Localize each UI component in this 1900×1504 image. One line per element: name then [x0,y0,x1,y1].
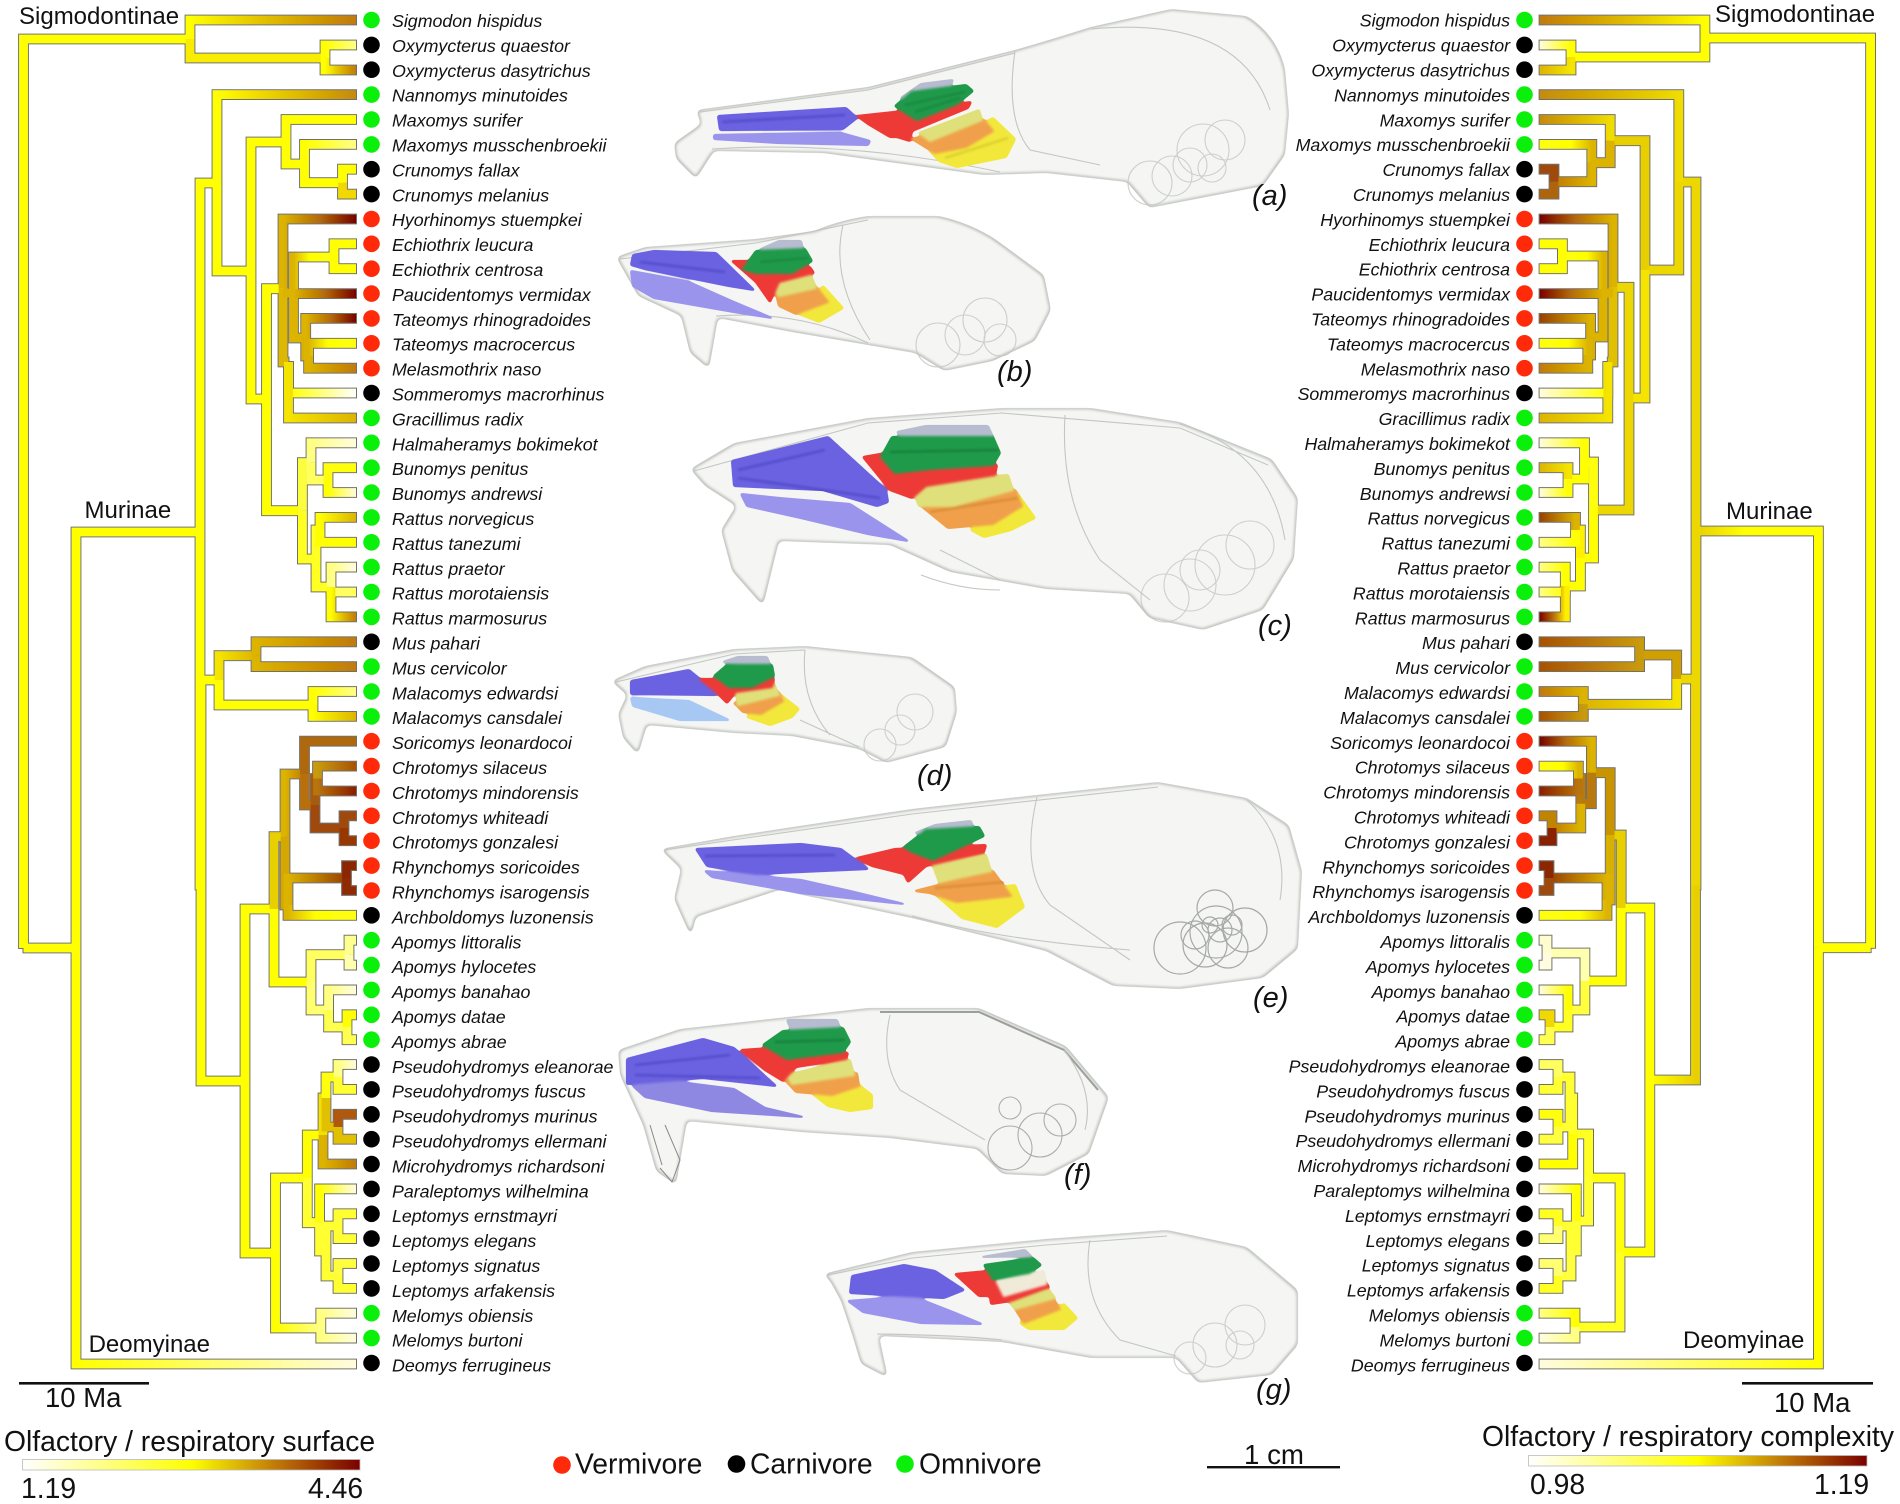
species names, left column: Soricomys leonardocoi [392,733,573,753]
species names, left column: Rattus praetor [392,559,506,579]
species names, left column: Mus cervicolor [392,658,508,678]
species names, right column: Bunomys penitus [1374,459,1510,479]
scale bar left: 10 Ma [19,1382,149,1413]
species names, left column: Paraleptomys wilhelmina [392,1181,589,1201]
species names, right column: Melomys obiensis [1369,1306,1510,1326]
species names, left column: Leptomys arfakensis [392,1281,555,1301]
species names, left column: Chrotomys mindorensis [392,783,579,803]
species names, left column: Microhydromys richardsoni [392,1156,605,1176]
species names, right column: Tateomys macrocercus [1327,334,1510,354]
species names, left column: Rattus marmosurus [392,609,547,629]
species names, right column: Bunomys andrewsi [1360,484,1511,504]
label: Sigmodontinae: Sigmodontinae [19,3,179,30]
species names, right column [1289,11,1511,1375]
species names, left column: Melomys obiensis [392,1306,533,1326]
species names, right column: Mus pahari [1422,633,1511,653]
panel letter (b): (b) [997,356,1032,388]
species names, left column: Tateomys macrocercus [392,335,575,355]
clade: Hyorhinomys to Gracillimus [266,219,356,418]
species names, right column: Malacomys edwardsi [1344,683,1511,703]
species names, left column: Crunomys fallax [392,160,521,180]
panel letter (f): (f) [1064,1159,1091,1191]
species names, left column: Oxymycterus quaestor [392,36,571,56]
colour legend: olfactory / respiratory surface: 4.46 [308,1472,363,1504]
species names, right column: Apomys datae [1395,1007,1510,1027]
clade: Pseudohydromys, Leptomys, Melomys [1540,1064,1650,1338]
skull (e) [660,782,1302,989]
species names, left column: Rattus morotaiensis [392,584,549,604]
colour legend: olfactory / respiratory complexity: 1.19 [1814,1468,1869,1500]
label: Murinae: Murinae [1726,498,1813,525]
species names, left column: Chrotomys whiteadi [392,808,549,828]
species names, right column: Oxymycterus dasytrichus [1311,60,1510,80]
species names, left column: Sigmodon hispidus [392,11,542,31]
species names, right column: Pseudohydromys fuscus [1316,1081,1510,1101]
skull (f) [618,1008,1109,1185]
scale bar right: 10 Ma [1742,1382,1873,1418]
species names, right column: Pseudohydromys murinus [1304,1106,1510,1126]
species names, right column: Gracillimus radix [1379,409,1511,429]
clade labels, right tree [1683,1,1875,1354]
species names, left column: Mus pahari [392,634,481,654]
species names, right column: Leptomys arfakensis [1347,1281,1510,1301]
species names, right column: Tateomys rhinogradoides [1311,310,1510,330]
species names, right column: Halmaheramys bokimekot [1304,434,1511,454]
species names, right column: Paraleptomys wilhelmina [1313,1181,1510,1201]
species names, right column: Echiothrix leucura [1369,235,1510,255]
species names, right column: Oxymycterus quaestor [1332,36,1511,56]
colour legend: olfactory / respiratory surface: 1.19 [21,1472,76,1504]
species names, left column: Leptomys elegans [392,1231,536,1251]
species names, right column: Rhynchomys soricoides [1322,857,1510,877]
species names, left column: Rhynchomys soricoides [392,858,580,878]
species names, left column: Oxymycterus dasytrichus [392,61,591,81]
species names, left column: Echiothrix leucura [392,235,533,255]
colour legend: olfactory / respiratory complexity [1482,1420,1895,1500]
phylogeny: olfactory / respiratory surface (left tree) [24,20,356,1364]
species names, right column: Melasmothrix naso [1361,359,1510,379]
skull (a) [674,9,1289,208]
species names, right column: Pseudohydromys eleanorae [1289,1056,1510,1076]
species names, right column: Nannomys minutoides [1334,85,1510,105]
skull (g) [823,1230,1298,1383]
species names, right column: Melomys burtoni [1380,1330,1511,1350]
clade: Pseudohydromys, Leptomys, Melomys [245,1064,356,1338]
skull (d) [611,646,957,763]
species names, left column: Leptomys ernstmayri [392,1206,558,1226]
diet legend [553,1448,1042,1480]
clade: Mus, Malacomys [201,642,356,885]
clade: Hyorhinomys to Gracillimus [1540,219,1645,418]
species names, left column: Archboldomys luzonensis [391,907,594,927]
legend: vermivore: Vermivore [575,1448,702,1480]
species names, left column: Sommeromys macrorhinus [392,384,605,404]
species names, right column: Apomys littoralis [1380,932,1510,952]
species names, right column: Chrotomys silaceus [1355,758,1510,778]
clade: Nannomys, Maxomys, Crunomys [1540,95,1696,885]
root branches [24,39,286,948]
clade: Halmaheramys, Bunomys, Rattus [1540,398,1629,617]
species names, left column [391,11,614,1376]
species names, left column: Rhynchomys isarogensis [392,882,590,902]
species names, left column: Apomys banahao [391,982,531,1002]
species names, right column: Chrotomys mindorensis [1323,783,1510,803]
species names, left column: Pseudohydromys murinus [392,1107,598,1127]
clade: Halmaheramys, Bunomys, Rattus [266,399,356,617]
species names, right column: Apomys hylocetes [1365,957,1510,977]
colour legend: olfactory / respiratory surface: Olfactory / respiratory surface [4,1425,375,1457]
scale bar right: 10 Ma: 10 Ma [1774,1387,1851,1418]
species names, right column: Mus cervicolor [1395,658,1511,678]
phylogeny: olfactory / respiratory complexity (right tree) [1540,20,1871,1364]
species names, left column: Hyorhinomys stuempkei [392,210,583,230]
species names, left column: Paucidentomys vermidax [392,285,592,305]
species names, left column: Rattus norvegicus [392,509,534,529]
species names, left column: Bunomys andrewsi [392,484,543,504]
species names, right column: Rattus tanezumi [1382,534,1511,554]
label: Deomyinae: Deomyinae [89,1331,210,1358]
species names, right column: Apomys banahao [1371,982,1510,1002]
scale bar left: 10 Ma: 10 Ma [45,1382,122,1413]
species names, right column: Microhydromys richardsoni [1298,1156,1511,1176]
species names, right column: Archboldomys luzonensis [1307,907,1510,927]
clade labels, left tree [19,3,210,1358]
species names, left column: Crunomys melanius [392,185,549,205]
species names, left column: Tateomys rhinogradoides [392,310,591,330]
species names, left column: Maxomys musschenbroekii [392,136,607,156]
species names, right column: Rattus norvegicus [1368,509,1510,529]
species names, right column: Chrotomys gonzalesi [1344,832,1511,852]
species names, right column: Rhynchomys isarogensis [1312,882,1510,902]
species names, left column: Melasmothrix naso [392,360,541,380]
skull (c) [690,408,1298,630]
clade: Sigmodontinae [190,20,356,70]
species names, right column: Sigmodon hispidus [1360,11,1510,31]
species names, right column: Hyorhinomys stuempkei [1320,210,1511,230]
species names, left column: Malacomys cansdalei [392,708,563,728]
clade: Soricomys, Chrotomys, Rhynchomys, Archboldomys, Apomys [201,741,356,1081]
species names, right column: Crunomys fallax [1383,160,1511,180]
species names, right column: Leptomys signatus [1362,1256,1510,1276]
species names, left column: Echiothrix centrosa [392,260,543,280]
species names, right column: Soricomys leonardocoi [1330,733,1511,753]
species names, right column: Malacomys cansdalei [1340,708,1511,728]
scale bar: 1 cm [1207,1439,1340,1470]
clade: Deomyinae branch [76,948,356,1364]
skull (b) [616,216,1051,371]
panel letter (c): (c) [1258,610,1292,642]
legend: omnivore: Omnivore [919,1448,1042,1480]
panel letter (a): (a) [1252,180,1287,212]
species names, left column: Maxomys surifer [392,111,523,131]
species names, right column: Deomys ferrugineus [1351,1355,1510,1375]
species names, left column: Apomys littoralis [391,932,522,952]
species names, right column: Maxomys musschenbroekii [1296,135,1511,155]
species names, right column: Crunomys melanius [1353,185,1510,205]
species names, left column: Malacomys edwardsi [392,683,559,703]
species names, right column: Rattus praetor [1397,558,1511,578]
panel letter (d): (d) [917,760,952,792]
label: Deomyinae: Deomyinae [1683,1327,1804,1354]
species names, right column: Leptomys ernstmayri [1345,1206,1511,1226]
species names, left column: Pseudohydromys eleanorae [392,1057,614,1077]
species names, right column: Leptomys elegans [1366,1231,1510,1251]
species names, left column: Melomys burtoni [392,1331,523,1351]
clade: Soricomys, Chrotomys, Rhynchomys, Archboldomys, Apomys [1540,741,1696,1080]
species names, left column: Pseudohydromys ellermani [392,1132,608,1152]
species names, left column: Chrotomys gonzalesi [392,833,559,853]
species names, right column: Rattus marmosurus [1355,608,1510,628]
scale bar: 1 cm: 1 cm [1244,1439,1304,1470]
species names, right column: Apomys abrae [1394,1032,1510,1052]
diet dots, right column [1516,12,1533,1371]
clade: Deomyinae branch [1540,948,1818,1364]
species names, left column: Deomys ferrugineus [392,1356,551,1376]
species names, left column: Bunomys penitus [392,459,529,479]
species names, left column: Apomys datae [391,1007,506,1027]
species names, left column: Rattus tanezumi [392,534,522,554]
clade: Sigmodontinae [1540,20,1705,70]
species names, left column: Chrotomys silaceus [392,758,547,778]
species names, left column: Halmaheramys bokimekot [392,434,599,454]
clade: Mus, Malacomys [1540,642,1696,885]
species names, right column: Maxomys surifer [1380,110,1511,130]
species names, right column: Rattus morotaiensis [1353,583,1510,603]
species names, left column: Leptomys signatus [392,1256,540,1276]
clade: Murinae stem [1696,531,1818,948]
species names, left column: Apomys hylocetes [391,957,536,977]
species names, right column: Paucidentomys vermidax [1311,285,1511,305]
diet dots, left column [363,12,380,1371]
species names, right column: Chrotomys whiteadi [1354,808,1511,828]
root branches [1705,38,1871,948]
colour legend: olfactory / respiratory surface [4,1425,375,1504]
legend: carnivore: Carnivore [750,1448,873,1480]
species names, left column: Nannomys minutoides [392,86,568,106]
clade: Nannomys, Maxomys, Crunomys [217,95,356,194]
species names, right column: Sommeromys macrorhinus [1298,384,1510,404]
panel letter (g): (g) [1256,1374,1291,1406]
panel letter (e): (e) [1253,982,1288,1014]
colour legend: olfactory / respiratory complexity: 0.98 [1530,1468,1585,1500]
species names, right column: Echiothrix centrosa [1359,260,1510,280]
species names, left column: Gracillimus radix [392,409,525,429]
label: Sigmodontinae: Sigmodontinae [1715,1,1875,28]
species names, left column: Pseudohydromys fuscus [392,1082,586,1102]
colour legend: olfactory / respiratory complexity: Olfactory / respiratory complexity [1482,1420,1895,1452]
species names, left column: Apomys abrae [391,1032,507,1052]
label: Murinae: Murinae [84,497,171,524]
species names, right column: Pseudohydromys ellermani [1296,1131,1511,1151]
